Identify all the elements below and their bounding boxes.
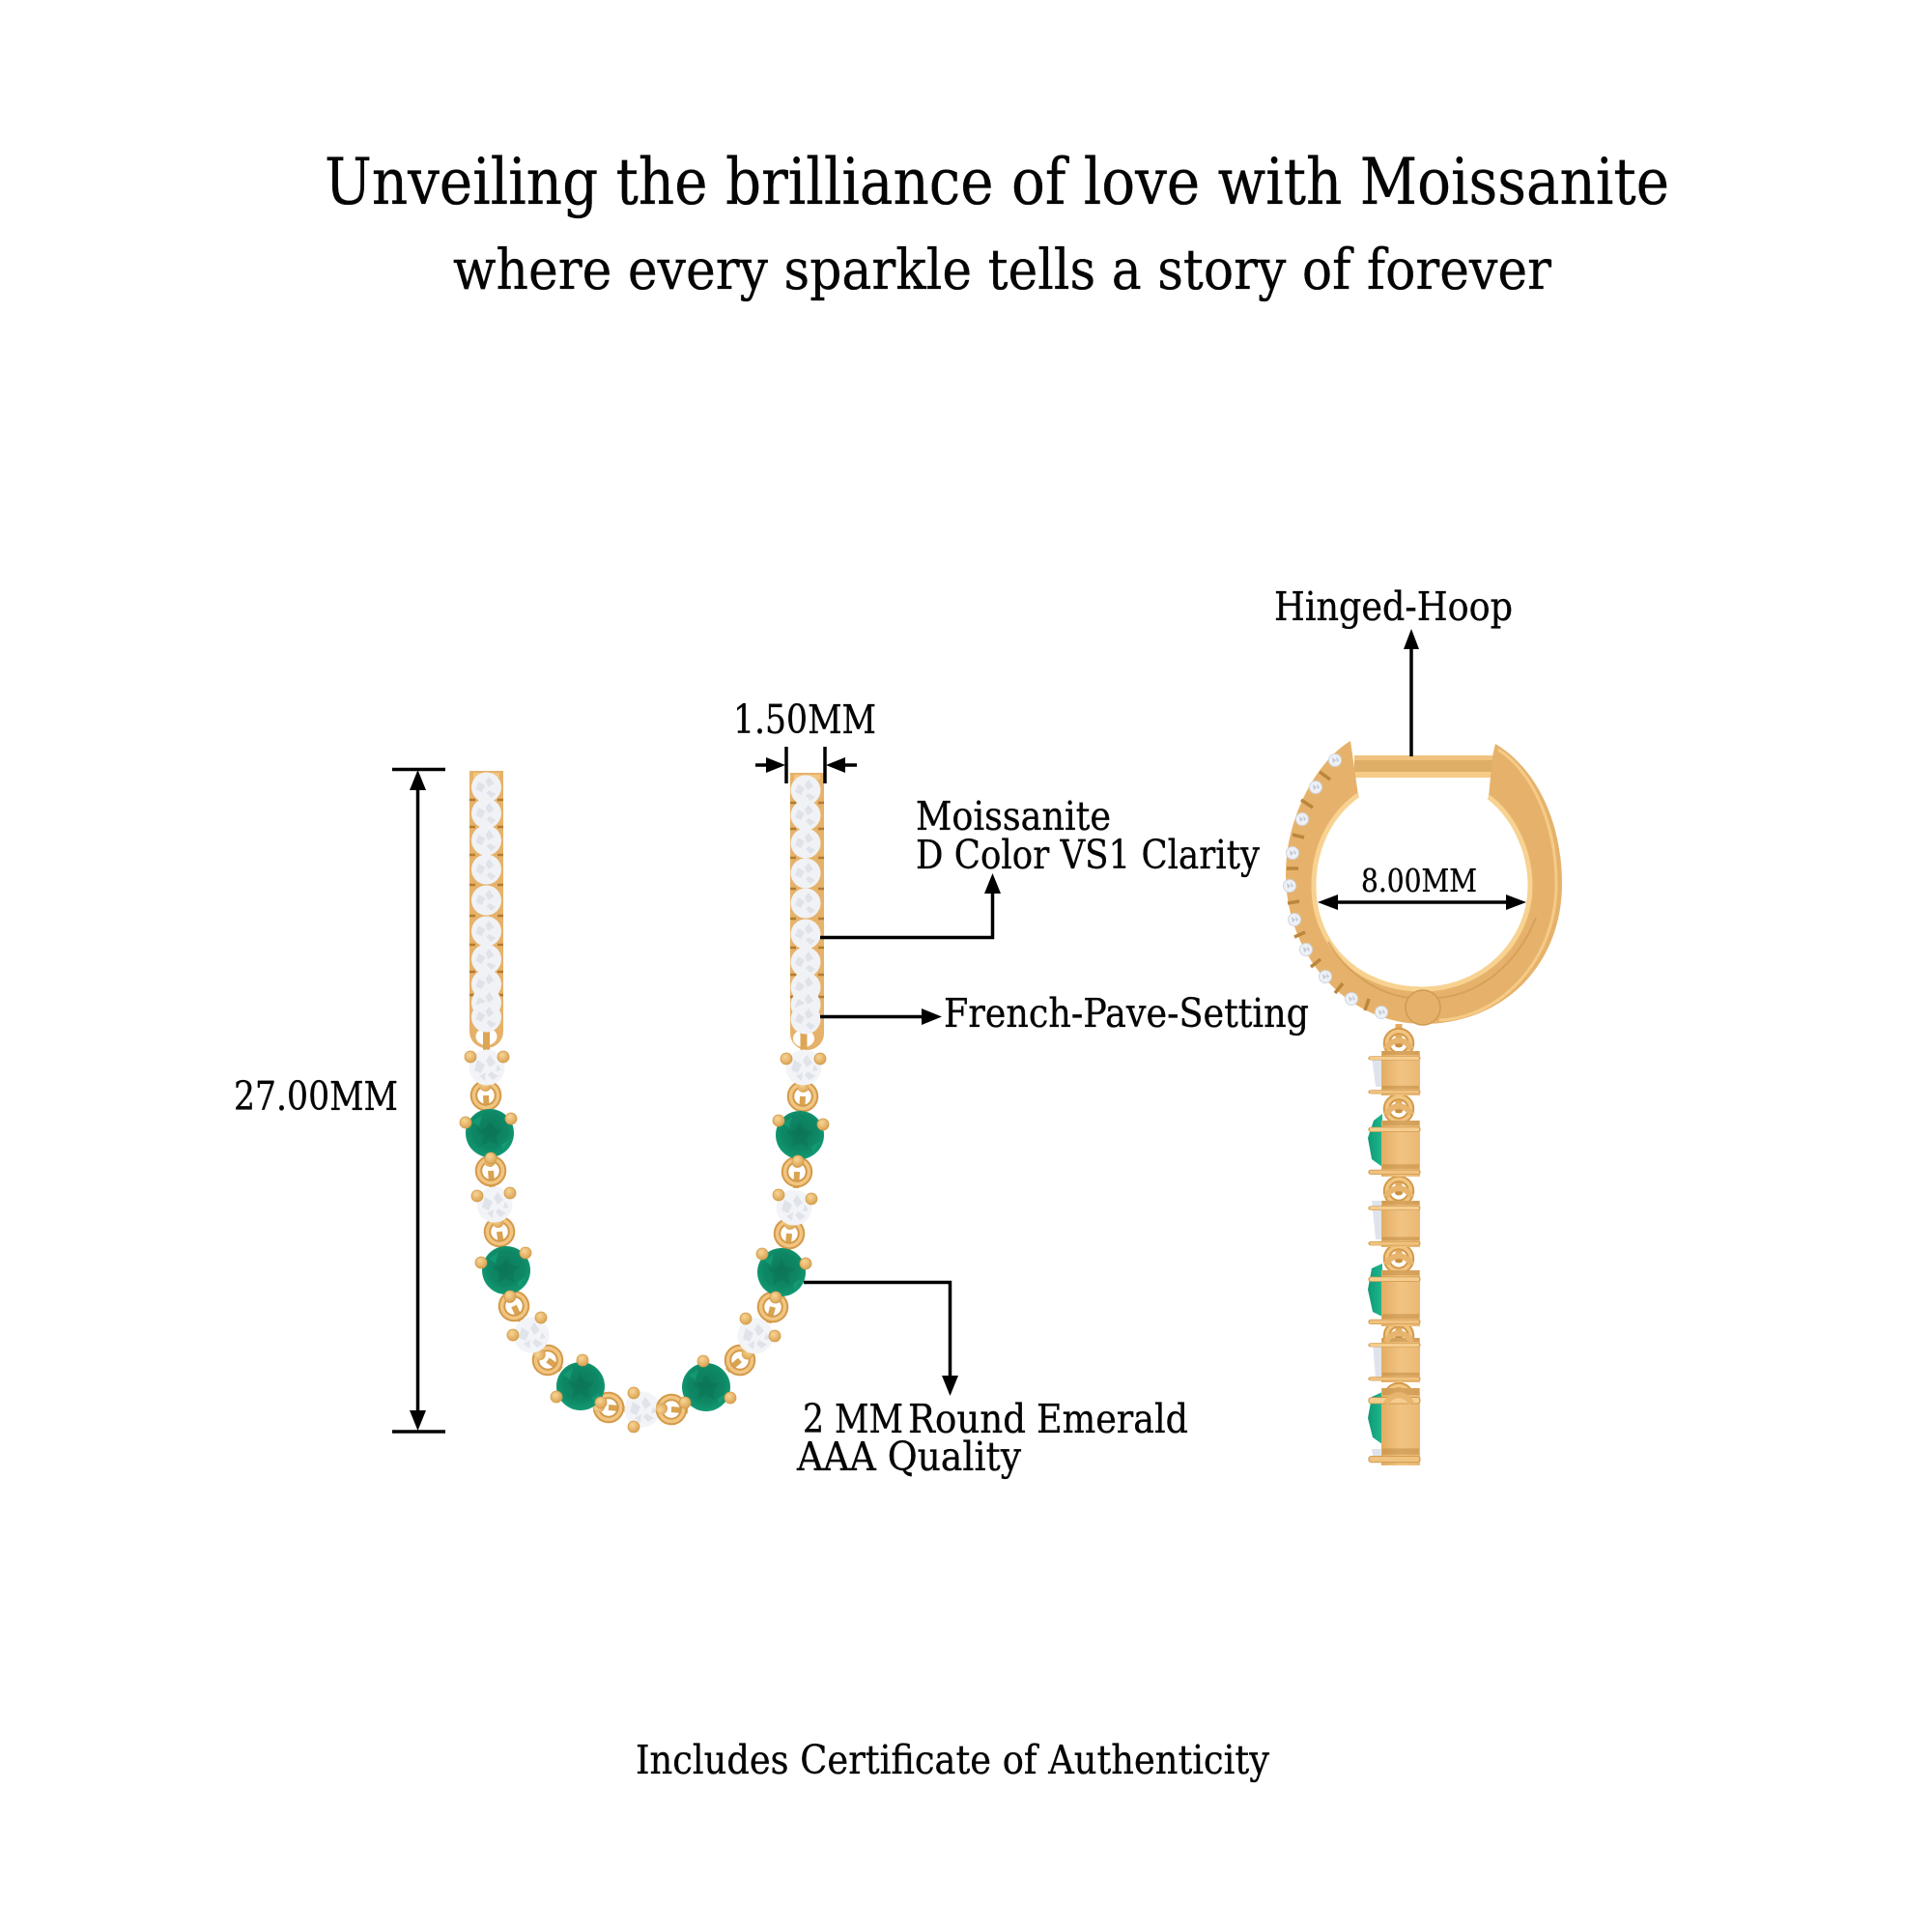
chain links left <box>473 1079 626 1421</box>
label: emerald: Emerald <box>1037 1396 1188 1442</box>
dimension arrow: 8.00MM <box>1318 895 1526 910</box>
hoop outer edge highlight <box>1439 750 1556 1020</box>
side links <box>1387 1024 1410 1410</box>
side link tops over settings <box>1386 1040 1411 1404</box>
front view earring: right strand <box>655 773 829 1423</box>
hoop band <box>1286 741 1562 1024</box>
label: emerald: 2 MM <box>803 1396 903 1442</box>
title line 2: where every sparkle tells a story of forever <box>453 237 1551 302</box>
moissanite stones left <box>465 1049 661 1433</box>
emeralds right <box>679 1111 829 1411</box>
label: emerald: AAA Quality <box>796 1434 1022 1480</box>
label: hinged hoop: Hinged-Hoop <box>1274 583 1513 630</box>
pave prong ticks <box>1287 772 1369 1010</box>
label: 8.00MM: 8.00MM <box>1361 862 1477 899</box>
callout arrow: emerald <box>804 1283 958 1396</box>
callout arrow: french pave <box>820 1009 942 1025</box>
label: moissanite <box>916 793 1261 878</box>
small pave stones <box>1283 753 1387 1018</box>
side gold settings <box>1369 1051 1420 1465</box>
hoop inner rim highlight <box>1314 795 1530 989</box>
callout arrow: hinged hoop <box>1404 629 1419 756</box>
moissanite stones right <box>738 1049 826 1354</box>
label: french pave setting: French-Pave-Setting <box>944 990 1309 1037</box>
side view drop strand <box>1368 1024 1420 1465</box>
hinge bar <box>1354 755 1492 778</box>
side stones <box>1368 1057 1382 1462</box>
label: 27.00MM: 27.00MM <box>234 1073 398 1120</box>
pave bar right <box>790 773 824 1053</box>
title line 1: Unveiling the brilliance of love with Moissanite <box>325 145 1669 219</box>
dimension arrows: 1.50MM <box>755 747 857 783</box>
label: emerald <box>796 1396 1188 1480</box>
hinge pin <box>1406 990 1440 1025</box>
label: 1.50MM: 1.50MM <box>733 696 876 743</box>
pave bar left <box>469 771 503 1053</box>
emeralds left <box>460 1109 607 1410</box>
front view earring: left strand <box>460 771 661 1433</box>
side view hinged hoop <box>1283 741 1562 1025</box>
footer note: Includes Certificate of Authenticity <box>636 1737 1270 1783</box>
label: moissanite: D Color VS1 Clarity <box>916 832 1261 878</box>
label: emerald: Round <box>908 1396 1026 1442</box>
chain links right <box>655 1080 815 1423</box>
hoop inner shadow <box>1328 918 1536 998</box>
dimension arrow: 27.00MM <box>392 769 445 1432</box>
callout arrow: moissanite <box>820 873 1001 937</box>
label: moissanite: Moissanite <box>916 793 1111 839</box>
